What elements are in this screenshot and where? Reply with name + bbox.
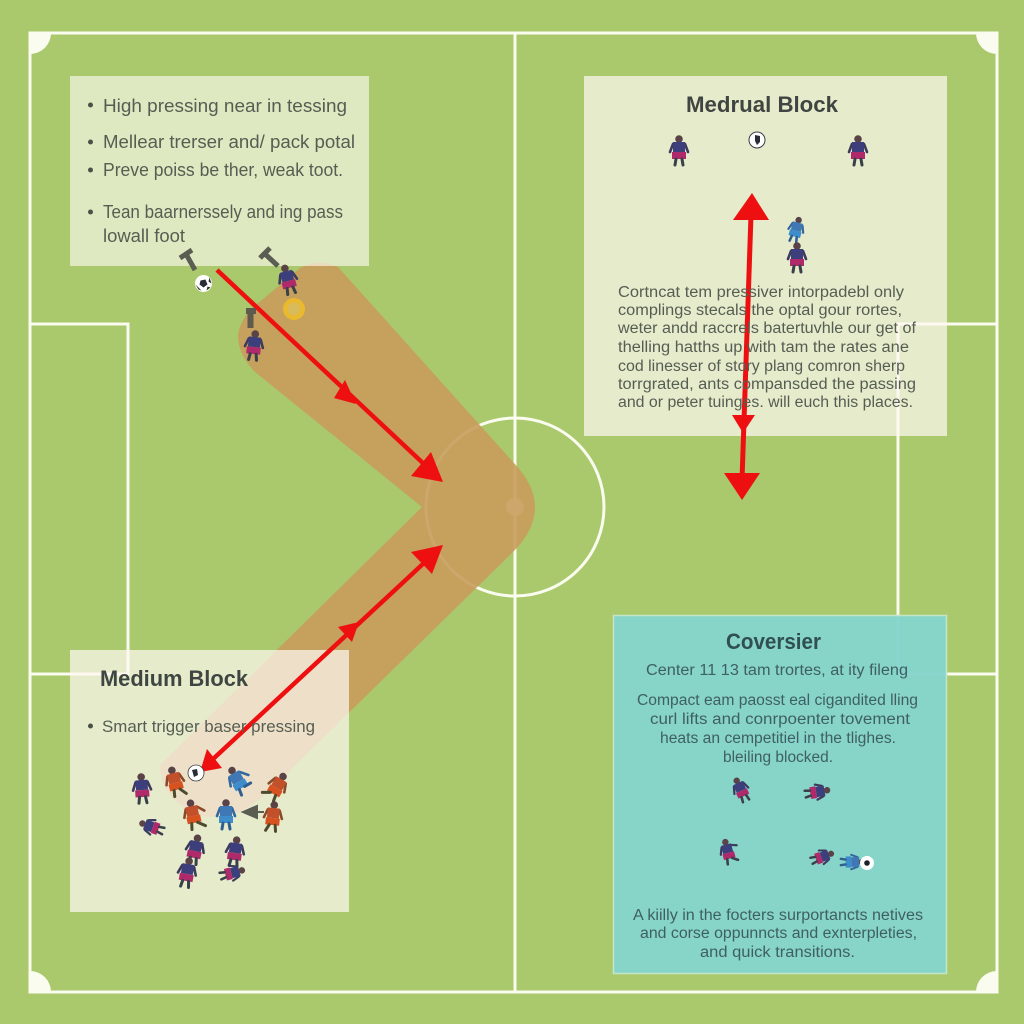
- text block: high press bullets: Mellear trerser and/ pack potal: [103, 132, 355, 152]
- text block: high press bullets: Tean baarnerssely and ing pass: [103, 202, 343, 222]
- text block: medrual block body: [617, 284, 917, 411]
- text block: medrual block body: cod linesser of story plang comron sherp: [618, 358, 905, 375]
- player: coversier three: [717, 836, 741, 865]
- arrow: vertical double-headed run: [724, 193, 769, 500]
- icon: marker post three: [246, 311, 256, 328]
- heading: Medrual Block: Medrual Block: [686, 92, 839, 117]
- text block: high press bullets: High pressing near in tessing: [103, 96, 347, 116]
- heading: Coversier: Coversier: [726, 629, 821, 654]
- group: medium block players: [132, 761, 293, 888]
- text block: coversier upper body: Compact eam paosst eal cigandited lling: [637, 692, 918, 709]
- player: medrual block left: [670, 135, 688, 165]
- icon: marker post one: [180, 250, 195, 270]
- panel: coversier background: [614, 616, 946, 974]
- player: blue 2: [217, 799, 235, 829]
- player: coversier one: [728, 775, 753, 804]
- player: purple 3: [224, 835, 246, 867]
- player: medrual block blue: [786, 215, 807, 243]
- text block: coversier upper body: bleiling blocked.: [723, 749, 833, 766]
- text block: high press bullets: [88, 96, 355, 246]
- text block: coversier upper body: [637, 692, 918, 766]
- text block: high press bullets: lowall foot: [103, 226, 185, 246]
- text block: medium block bullet: Smart trigger baser pressing: [102, 717, 315, 736]
- player: purple fallen: [137, 815, 166, 838]
- text block: coversier lower body: and quick transitions.: [700, 944, 855, 961]
- icon: ball in medium block: [188, 765, 204, 781]
- text block: coversier upper body: curl lifts and conrpoenter tovement: [650, 711, 911, 728]
- arrow: lower pressing run: [200, 545, 443, 772]
- player: medrual block centre: [788, 242, 806, 272]
- text block: medrual block body: Cortncat tem pressiver intorpadebl only: [618, 284, 904, 301]
- player: red 3: [181, 797, 208, 831]
- text block: coversier lower body: A kiilly in the focters surportancts netives: [633, 907, 923, 924]
- arrow: top pressing run: [217, 270, 443, 482]
- text block: medrual block body: and or peter tuinges. will euch this places.: [618, 394, 913, 411]
- text block: medrual block body: complings stecals the optal gour rortes,: [618, 302, 902, 319]
- heading: Medium Block: Medium Block: [100, 666, 249, 691]
- text: coversier subtitle: Center 11 13 tam trortes, at ity fileng: [646, 662, 908, 679]
- panel: medrual block background: [584, 76, 947, 436]
- player: blue 1: [222, 761, 255, 798]
- player: coversier two: [804, 782, 832, 802]
- player: coversier blue: [841, 855, 865, 869]
- player: medrual block right: [849, 135, 867, 165]
- icon: grey marker arrow: [243, 806, 264, 818]
- player: red 2: [261, 768, 293, 804]
- panel: medium block background: [70, 650, 349, 912]
- player: purple 4: [176, 856, 199, 888]
- icon: ball in coversier: [860, 856, 874, 870]
- player: high press one: [275, 262, 300, 296]
- player: high press two: [244, 329, 265, 361]
- text block: medrual block body: thelling hatths up with tam the rates ane: [618, 339, 909, 356]
- text block: medrual block body: weter andd raccrels batertuvhle our get of: [617, 320, 917, 337]
- icon: ball near high press panel: [195, 275, 212, 292]
- text block: medrual block body: torrgrated, ants compansded the passing: [618, 376, 916, 393]
- pressing zone: orange V band: [160, 263, 535, 817]
- player: purple 2: [183, 833, 207, 866]
- icon: ball in medrual block: [749, 132, 765, 148]
- text block: coversier lower body: and corse oppunncts and exnterpleties,: [640, 925, 917, 942]
- text block: high press bullets: Preve poiss be ther, weak toot.: [103, 160, 343, 180]
- player: coversier four: [809, 846, 836, 868]
- icon: marker post two: [260, 248, 278, 266]
- group: coversier players: [717, 775, 874, 870]
- player: purple 1: [132, 773, 152, 804]
- player: red 1: [162, 764, 187, 798]
- player: red 4: [263, 800, 284, 832]
- player: purple lying: [219, 862, 247, 883]
- icon: gold coin marker: [283, 298, 305, 320]
- panel: high press background: [70, 76, 369, 266]
- text block: coversier upper body: heats an cempetitiel in the tlighes.: [660, 730, 896, 747]
- text block: coversier lower body: [633, 907, 923, 961]
